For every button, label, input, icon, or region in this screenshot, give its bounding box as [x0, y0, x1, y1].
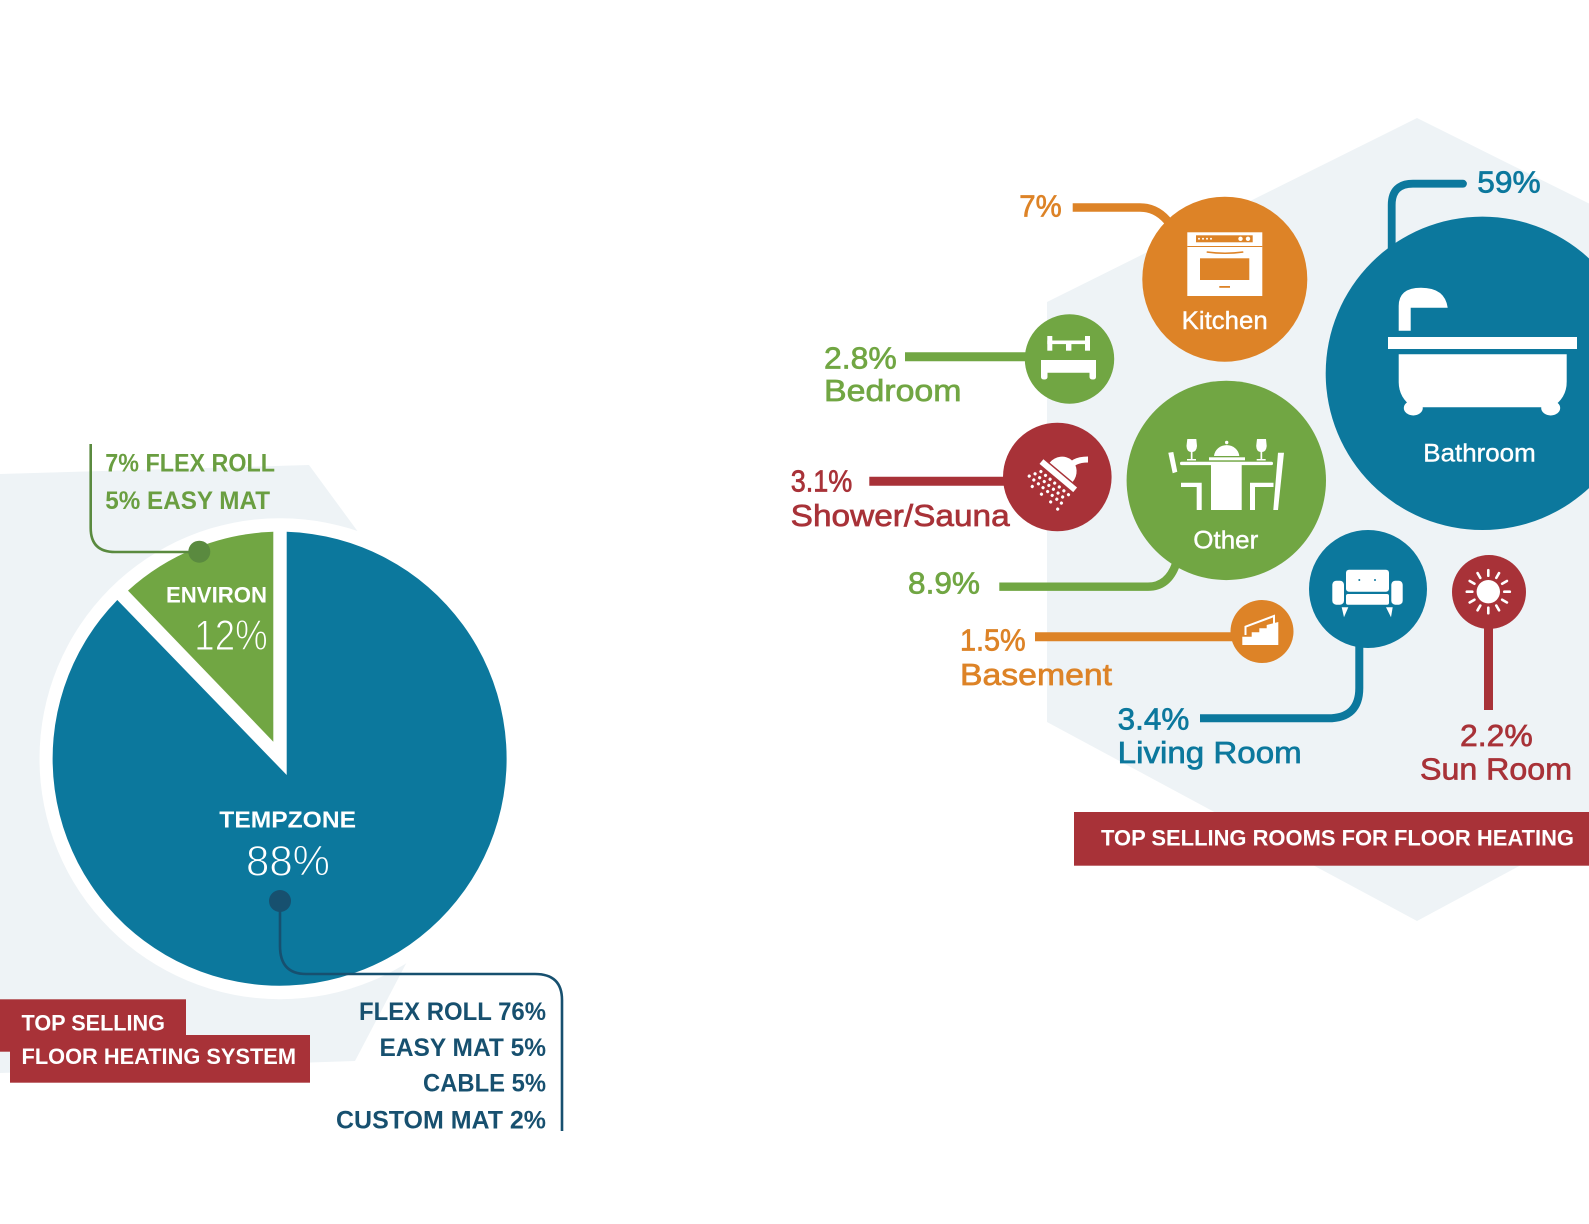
callout: environ breakdown	[91, 444, 275, 563]
icon: stairs	[1242, 616, 1278, 645]
connector: living room	[1200, 640, 1359, 718]
connector: bathroom	[1392, 184, 1463, 255]
sun room circle	[1452, 555, 1526, 629]
label: bedroom: Bedroom	[824, 373, 962, 408]
bathroom circle	[1326, 217, 1589, 530]
environ label: ENVIRON	[166, 583, 267, 608]
heading banner: top selling floor heating system	[0, 999, 310, 1083]
icon: sofa	[1332, 570, 1403, 617]
label: shower sauna: Shower/Sauna	[791, 498, 1011, 533]
background hexagon right	[1047, 118, 1589, 921]
heading banner: top selling floor heating system: TOP SELLING	[22, 1011, 165, 1036]
heading banner: top selling rooms for floor heating: TOP SELLING ROOMS FOR FLOOR HEATING	[1101, 826, 1574, 851]
label: shower sauna: 3.1%	[791, 463, 852, 498]
pie chart	[40, 518, 520, 999]
label: living room	[1118, 701, 1302, 770]
label: bedroom	[824, 340, 962, 408]
label: sun room: 2.2%	[1460, 718, 1533, 753]
bedroom circle	[1025, 314, 1114, 404]
pie slice: tempzone	[53, 532, 507, 986]
callout: tempzone breakdown	[269, 890, 562, 1134]
pie slice: environ	[128, 532, 273, 742]
living room circle	[1309, 530, 1427, 648]
callout: tempzone breakdown: CUSTOM MAT 2%	[336, 1106, 546, 1134]
tempzone value: 88%	[246, 838, 330, 886]
heading banner: top selling floor heating system: FLOOR HEATING SYSTEM	[22, 1044, 296, 1069]
connector: basement	[1035, 632, 1240, 641]
connector: other	[999, 564, 1176, 587]
kitchen label: Kitchen	[1182, 307, 1268, 335]
icon: oven	[1187, 232, 1262, 296]
shower circle	[1003, 423, 1112, 531]
callout: environ breakdown: 5% EASY MAT	[105, 487, 270, 515]
connector: shower	[869, 477, 1015, 486]
label: living room: Living Room	[1118, 735, 1302, 770]
background hexagon left	[0, 465, 518, 1073]
other label: Other	[1193, 526, 1258, 554]
label: sun room: Sun Room	[1420, 751, 1572, 786]
icon: bed	[1041, 336, 1096, 380]
tempzone label: TEMPZONE	[219, 807, 356, 833]
panel: top selling floor heating system	[0, 444, 562, 1134]
icon: dining table	[1168, 439, 1284, 510]
panel: top selling rooms	[791, 118, 1589, 921]
bathroom label: Bathroom	[1423, 440, 1536, 468]
callout: environ breakdown: 7% FLEX ROLL	[105, 450, 275, 478]
other circle	[1127, 381, 1326, 580]
label: bathroom percent: 59%	[1477, 165, 1541, 200]
callout: tempzone breakdown: EASY MAT 5%	[380, 1034, 546, 1062]
heading banner: top selling rooms for floor heating	[1074, 812, 1589, 866]
icon: sun	[1467, 570, 1510, 613]
label: shower sauna	[791, 463, 1011, 533]
label: bedroom: 2.8%	[824, 340, 897, 375]
label: basement: 1.5%	[960, 623, 1026, 658]
connector: kitchen	[1073, 208, 1170, 224]
label: other percent: 8.9%	[908, 565, 980, 600]
label: sun room	[1420, 718, 1572, 786]
connector: sun room	[1484, 620, 1493, 710]
icon: shower head	[1022, 445, 1089, 511]
callout: tempzone breakdown: FLEX ROLL 76%	[359, 998, 546, 1026]
label: basement	[960, 623, 1112, 692]
connector: bedroom	[905, 352, 1035, 361]
icon: bathtub	[1388, 288, 1577, 416]
kitchen circle	[1142, 197, 1307, 362]
label: living room: 3.4%	[1118, 701, 1189, 736]
callout: tempzone breakdown: CABLE 5%	[423, 1070, 546, 1098]
basement circle	[1230, 600, 1294, 663]
label: kitchen percent: 7%	[1019, 189, 1062, 224]
environ value: 12%	[194, 612, 268, 660]
label: basement: Basement	[960, 657, 1112, 692]
